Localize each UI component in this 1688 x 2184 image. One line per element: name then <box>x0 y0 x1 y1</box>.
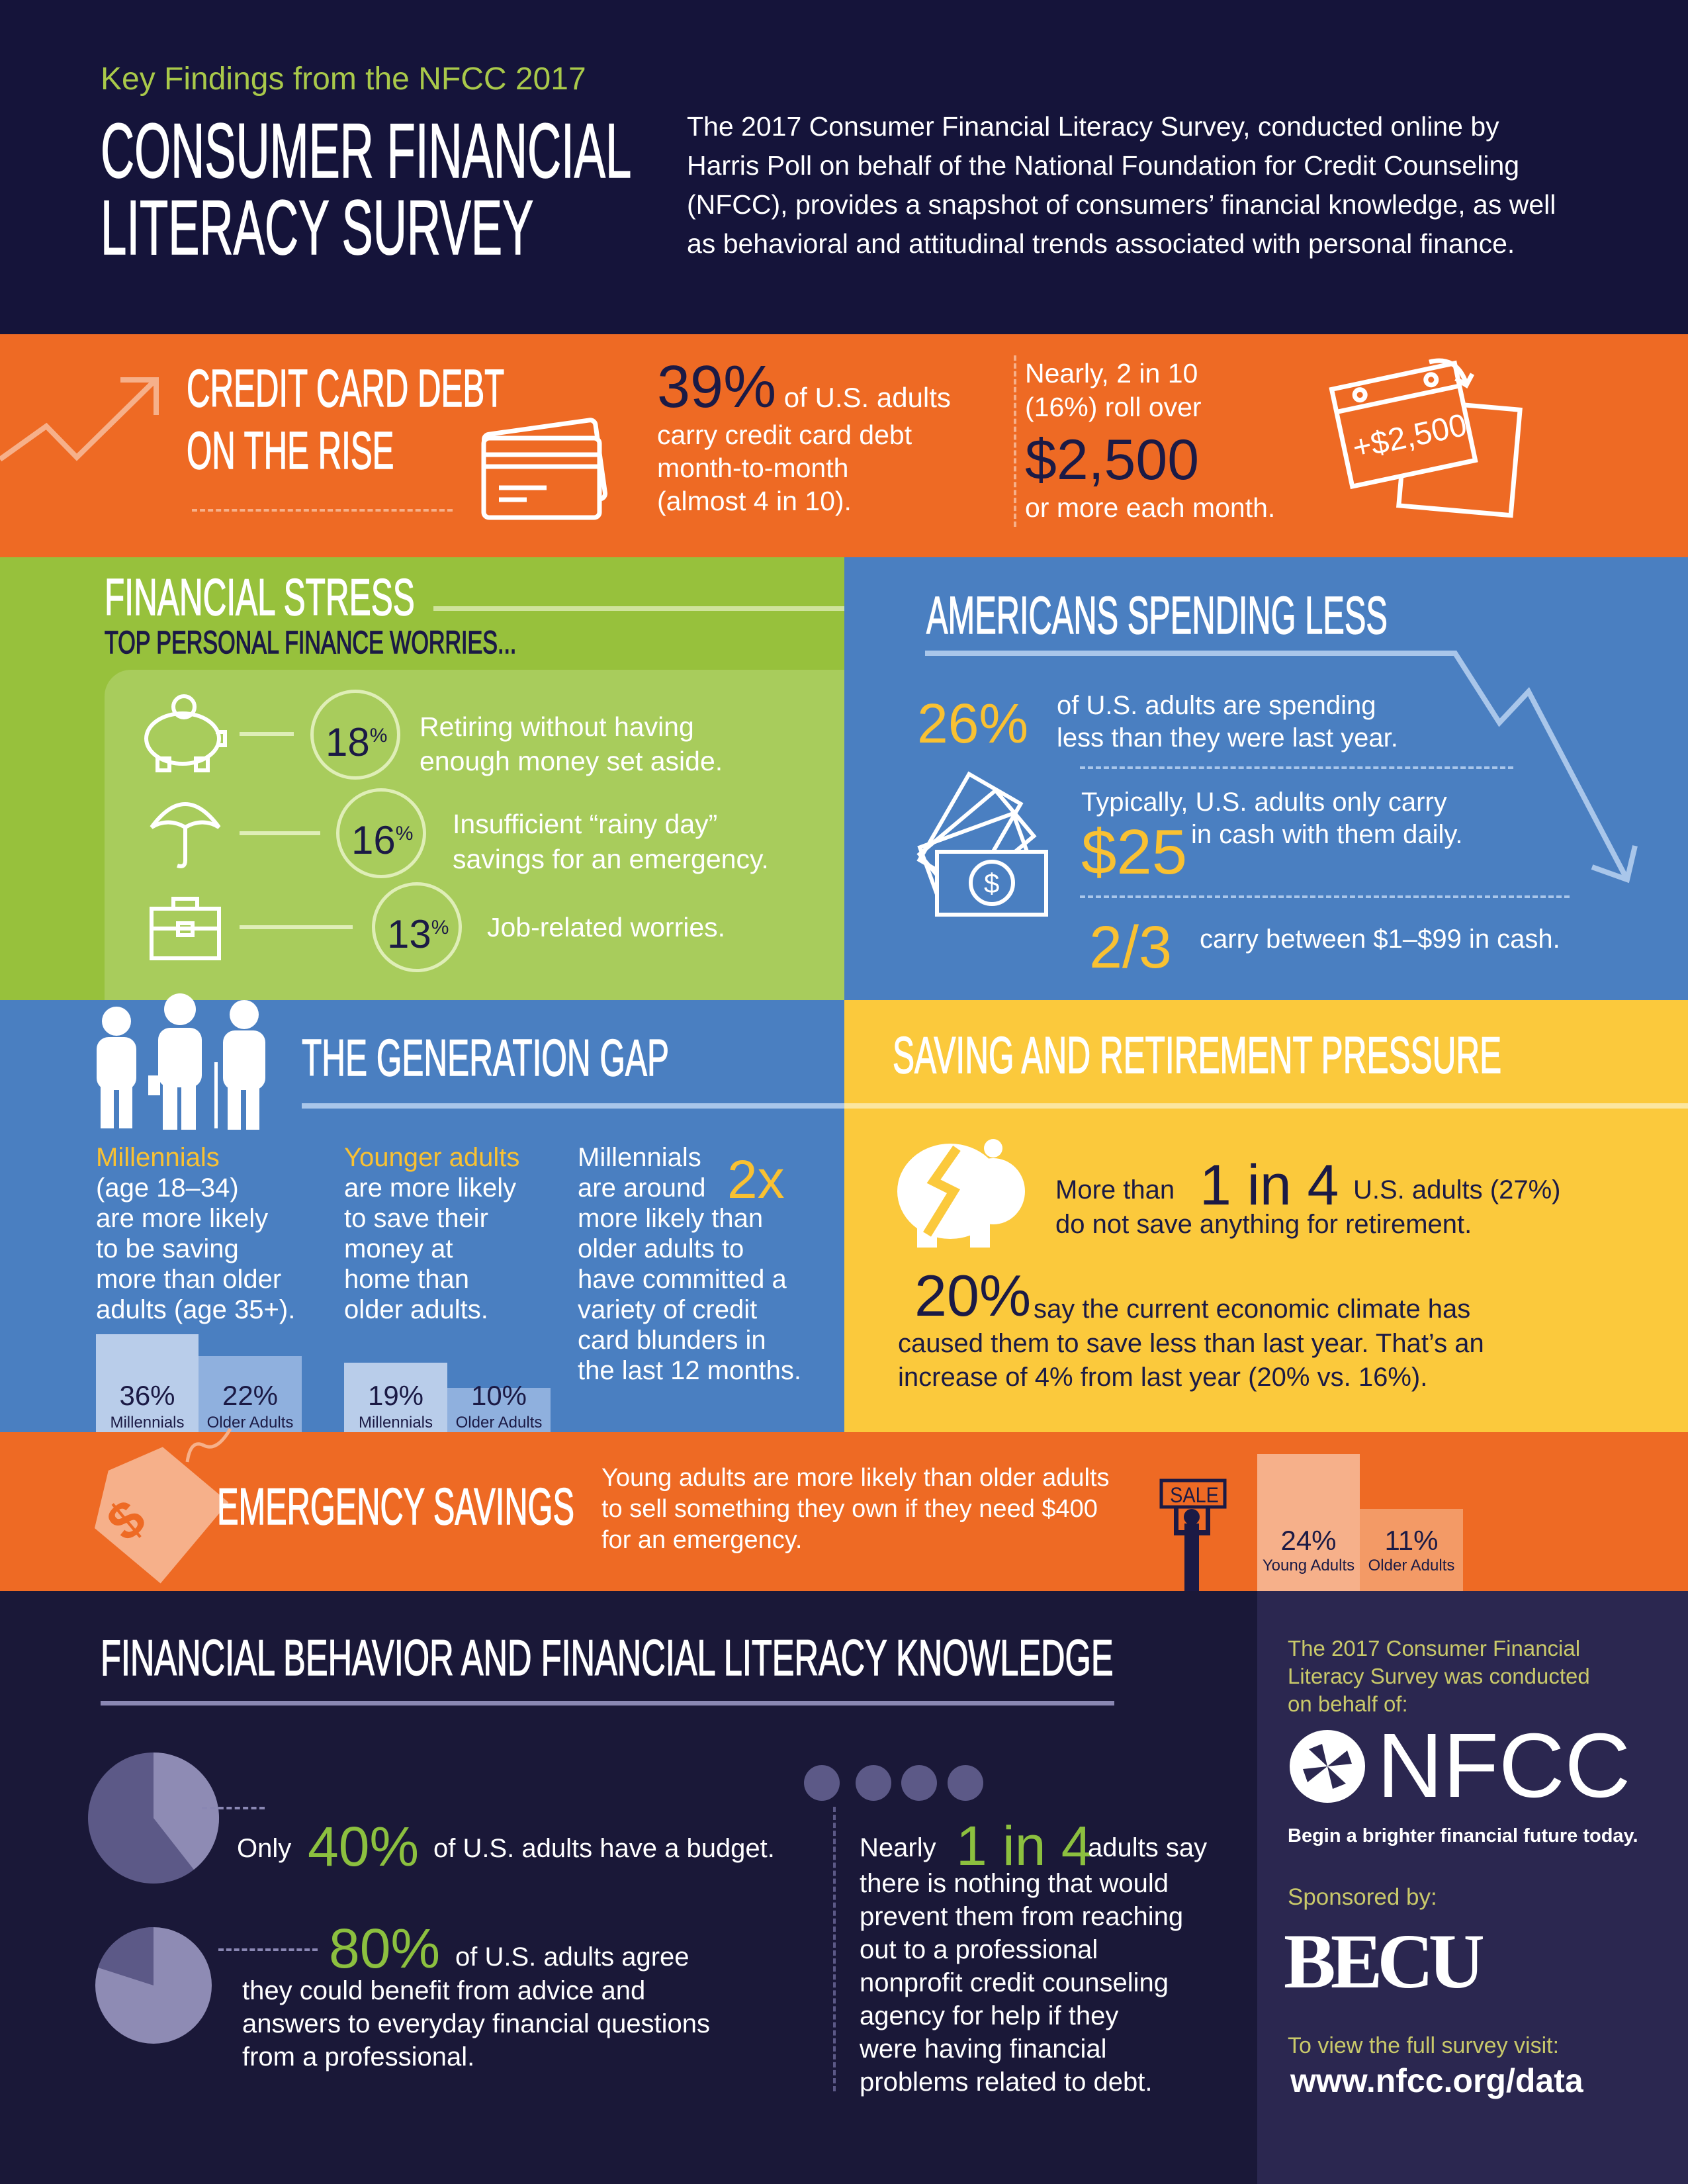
text: survey link <box>1288 2030 1658 2103</box>
header panel <box>0 0 1688 334</box>
text: to sell something they own if they need $400 <box>601 1495 1098 1523</box>
vertical dashed divider <box>1014 355 1016 527</box>
stat: 39%: month-to-month <box>657 453 848 483</box>
stat: 20%: caused them to save less than last year. That’s an <box>898 1329 1484 1358</box>
stat: 39% <box>657 354 951 516</box>
stat: 20% <box>898 1263 1484 1392</box>
panel: financial stress <box>0 557 844 1000</box>
stat: 1 in 4: do not save anything for retirement. <box>1055 1210 1472 1239</box>
icon: broken piggy bank <box>897 1139 1025 1248</box>
title: CONSUMER FINANCIAL <box>101 107 631 194</box>
worry: retiring 18%: Retiring without having <box>420 711 694 742</box>
stat: 39%: 39% of U.S. adults <box>657 354 951 420</box>
bar chart: 36% vs 22%: 22% <box>222 1380 278 1411</box>
column: credit card blunders 2x: Millennials <box>578 1143 701 1172</box>
stat: 80% advice: they could benefit from advice and <box>242 1976 645 2005</box>
worries list <box>105 670 844 1000</box>
column: credit card blunders 2x <box>578 1143 801 1385</box>
intro text: (NFCC), provides a snapshot of consumers’ financial knowledge, as well <box>687 189 1556 220</box>
sidebar: sponsors <box>1257 1591 1688 2184</box>
stat: 1 in 4 counseling: problems related to debt. <box>860 2068 1152 2097</box>
stat: 80% advice: answers to everyday financial questions <box>242 2009 710 2038</box>
subheading: TOP PERSONAL FINANCE WORRIES... <box>105 625 516 660</box>
column: younger adults at home: home than <box>344 1265 469 1294</box>
icon: rising arrow <box>0 377 159 462</box>
column: millennials saving <box>96 1143 302 1432</box>
stat: 1 in 4: U.S. adults (27%) <box>1353 1175 1560 1205</box>
worry: retiring 18%: enough money set aside. <box>420 746 723 776</box>
stat: 1 in 4 counseling: were having financial <box>860 2034 1107 2064</box>
worry: job 13% <box>150 882 725 972</box>
logo: NFCC: Begin a brighter financial future today. <box>1288 1825 1638 1846</box>
intro text <box>687 111 1556 259</box>
worry: rainy day 16%: 16% <box>351 818 413 862</box>
stat: 1 in 4 counseling: out to a professional <box>860 1935 1098 1964</box>
stat: 26%: less than they were last year. <box>1057 723 1398 752</box>
icon: person with sale sign <box>1159 1479 1227 1591</box>
stat: 1 in 4 counseling: prevent them from reaching <box>860 1902 1183 1931</box>
icon: umbrella <box>150 802 221 868</box>
bar chart: 24% vs 11%: Older Adults <box>1368 1557 1454 1574</box>
panel: americans spending less <box>844 557 1688 1000</box>
icon: piggy bank <box>144 694 227 772</box>
text: for an emergency. <box>601 1526 802 1554</box>
stat: 80% advice <box>242 1917 710 2071</box>
worry: retiring 18% <box>144 690 723 780</box>
panel: generation gap <box>0 1000 844 1432</box>
worry: rainy day 16% <box>150 788 769 878</box>
bar chart: 19% vs 10%: Millennials <box>359 1414 433 1432</box>
icon: price tag <box>95 1428 232 1583</box>
chart: pie 80% <box>95 1927 212 2044</box>
heading: FINANCIAL BEHAVIOR AND FINANCIAL LITERACY KNOWLEDGE <box>101 1630 1114 1686</box>
column: younger adults at home: to save their <box>344 1204 488 1233</box>
column: millennials saving: more than older <box>96 1265 281 1294</box>
stat: 1 in 4 <box>1055 1154 1560 1239</box>
stat: 26%: 26% <box>917 692 1028 754</box>
stat: 1 in 4 counseling: nonprofit credit counseling <box>860 1968 1169 1997</box>
stat: 20%: 20% <box>914 1263 1031 1328</box>
text: conducted on behalf: Literacy Survey was conducted <box>1288 1664 1590 1688</box>
stat: 40% budget: of U.S. adults have a budget. <box>433 1834 775 1863</box>
stat: 26%: of U.S. adults are spending <box>1057 691 1376 720</box>
text: Young adults are more likely than older adults <box>601 1464 1110 1492</box>
dashed divider <box>192 509 453 512</box>
icon: person with sale sign: SALE <box>1170 1484 1219 1507</box>
column: credit card blunders 2x: more likely than <box>578 1204 763 1233</box>
stat: $2,500: (16%) roll over <box>1025 392 1202 422</box>
bar chart: 36% vs 22% <box>96 1334 302 1432</box>
column: younger adults at home: are more likely <box>344 1173 516 1203</box>
heading: CREDIT CARD DEBT <box>187 359 504 418</box>
text: survey link: To view the full survey visit: <box>1288 2033 1559 2058</box>
column: younger adults at home: money at <box>344 1234 453 1263</box>
column: millennials saving: to be saving <box>96 1234 239 1263</box>
stat: $25: $25 <box>1081 817 1187 887</box>
icon: cash <box>917 772 1048 917</box>
stat: 1 in 4 counseling: there is nothing that would <box>860 1869 1169 1898</box>
column: credit card blunders 2x: variety of credit <box>578 1295 757 1324</box>
stat: $2,500: $2,500 <box>1025 428 1199 492</box>
stat: 1 in 4 counseling <box>859 1815 1207 2097</box>
icon: cash: $ <box>984 868 999 899</box>
column: credit card blunders 2x: have committed a <box>578 1265 787 1294</box>
bar chart: 19% vs 10%: Older Adults <box>456 1414 542 1432</box>
column: credit card blunders 2x: 2x <box>727 1150 785 1210</box>
column: credit card blunders 2x: card blunders in <box>578 1326 766 1355</box>
heading <box>187 359 504 480</box>
stat: 2/3: 2/3 <box>1089 915 1172 981</box>
stat: 2/3: carry between $1–$99 in cash. <box>1200 925 1560 954</box>
stat: 80% advice: from a professional. <box>242 2042 474 2071</box>
text <box>601 1464 1110 1554</box>
stat: 1 in 4 counseling: 1 in 4 <box>956 1815 1092 1877</box>
heading: FINANCIAL STRESS <box>105 568 415 626</box>
stat: 1 in 4 counseling: agency for help if they <box>860 2001 1118 2030</box>
bar chart: 24% vs 11% <box>1257 1454 1463 1591</box>
stat: 39%: carry credit card debt <box>657 420 912 450</box>
text: conducted on behalf <box>1288 1636 1590 1716</box>
stat: 39%: (almost 4 in 10). <box>657 486 852 516</box>
panel: credit card debt <box>0 334 1688 557</box>
column: millennials saving: are more likely <box>96 1204 268 1233</box>
stat: $2,500: or more each month. <box>1025 492 1275 523</box>
bar chart: 36% vs 22%: Older Adults <box>207 1414 293 1432</box>
icon: dots <box>804 1765 983 1801</box>
worry: rainy day 16%: Insufficient “rainy day” <box>453 809 717 839</box>
bar chart: 24% vs 11%: Young Adults <box>1263 1557 1355 1574</box>
column: millennials saving: Millennials <box>96 1143 220 1172</box>
column: credit card blunders 2x: are around <box>578 1173 705 1203</box>
logo: NFCC <box>1288 1715 1638 1846</box>
logo: BECU: BECU <box>1284 1918 1480 2005</box>
icon: credit cards <box>482 418 607 520</box>
title <box>101 107 631 271</box>
text: survey link: www.nfcc.org/data <box>1290 2062 1583 2099</box>
bar chart: 19% vs 10%: 19% <box>368 1380 423 1411</box>
stat: $25: in cash with them daily. <box>1191 820 1463 849</box>
column: credit card blunders 2x: older adults to <box>578 1234 744 1263</box>
worry: job 13%: Job-related worries. <box>487 912 725 942</box>
column: younger adults at home: Younger adults <box>344 1143 519 1172</box>
intro text: Harris Poll on behalf of the National Foundation for Credit Counseling <box>687 150 1519 181</box>
heading: EMERGENCY SAVINGS <box>217 1477 574 1535</box>
column: millennials saving: (age 18–34) <box>96 1173 239 1203</box>
icon: three people <box>97 993 265 1130</box>
stat: $25: Typically, U.S. adults only carry <box>1081 788 1447 817</box>
text: conducted on behalf: The 2017 Consumer Financial <box>1288 1636 1580 1661</box>
heading: THE GENERATION GAP <box>302 1028 669 1087</box>
worry: job 13%: 13% <box>387 912 449 956</box>
stat: $25 <box>1081 788 1463 887</box>
column: millennials saving: adults (age 35+). <box>96 1295 295 1324</box>
stat: 80% advice: of U.S. adults agree <box>455 1942 689 1972</box>
icon: price tag: $ <box>96 1488 156 1552</box>
icon: calendar +$2,500 <box>1329 359 1523 518</box>
stat: 1 in 4: More than <box>1055 1175 1175 1205</box>
heading: AMERICANS SPENDING LESS <box>926 586 1388 645</box>
bar chart: 24% vs 11%: 11% <box>1385 1525 1438 1556</box>
subtitle: Key Findings from the NFCC 2017 <box>101 62 586 97</box>
title: LITERACY SURVEY <box>101 184 533 271</box>
stat: 40% budget <box>237 1815 775 1878</box>
bar chart: 36% vs 22%: Millennials <box>110 1414 185 1432</box>
stat: 80% advice: 80% <box>329 1917 440 1979</box>
stat: 40% budget: Only <box>237 1834 291 1863</box>
intro text: as behavioral and attitudinal trends associated with personal finance. <box>687 228 1515 259</box>
worry: rainy day 16%: savings for an emergency. <box>453 844 769 874</box>
worry: retiring 18%: 18% <box>326 720 387 764</box>
column: credit card blunders 2x: the last 12 months. <box>578 1356 801 1385</box>
bar chart: 36% vs 22%: 36% <box>119 1380 175 1411</box>
column: younger adults at home <box>344 1143 551 1432</box>
text: conducted on behalf: on behalf of: <box>1288 1692 1408 1716</box>
stat: 1 in 4 counseling: Nearly <box>860 1833 936 1862</box>
stat: 26% <box>917 691 1398 754</box>
icon: calendar +$2,500: +$2,500 <box>1349 408 1470 466</box>
arrow: falling trend <box>925 651 1638 883</box>
stat: 20%: say the current economic climate has <box>1034 1295 1470 1324</box>
panel: emergency savings <box>0 1432 1688 1591</box>
stat: 2/3 <box>1089 915 1560 981</box>
chart: pie 40% <box>88 1752 219 1884</box>
intro text: The 2017 Consumer Financial Literacy Survey, conducted online by <box>687 111 1499 142</box>
panel: financial behavior <box>0 1591 1257 2184</box>
icon: briefcase <box>150 897 221 960</box>
logo: NFCC: NFCC <box>1377 1715 1630 1817</box>
stat: 40% budget: 40% <box>308 1815 419 1878</box>
text: sponsored: Sponsored by: <box>1288 1884 1437 1910</box>
heading: ON THE RISE <box>187 421 394 480</box>
stat: 1 in 4 counseling: adults say <box>1088 1833 1207 1862</box>
stat: 20%: increase of 4% from last year (20% vs. 16%). <box>898 1363 1427 1392</box>
stat: $2,500 <box>1025 358 1275 523</box>
stat: 1 in 4: 1 in 4 <box>1200 1154 1339 1217</box>
panel: saving and retirement pressure <box>844 1000 1688 1432</box>
bar chart: 24% vs 11%: 24% <box>1280 1525 1337 1556</box>
column: younger adults at home: older adults. <box>344 1295 488 1324</box>
stat: $2,500: Nearly, 2 in 10 <box>1025 358 1198 388</box>
heading: SAVING AND RETIREMENT PRESSURE <box>893 1026 1501 1084</box>
bar chart: 19% vs 10%: 10% <box>471 1380 527 1411</box>
bar chart: 19% vs 10% <box>344 1363 551 1432</box>
